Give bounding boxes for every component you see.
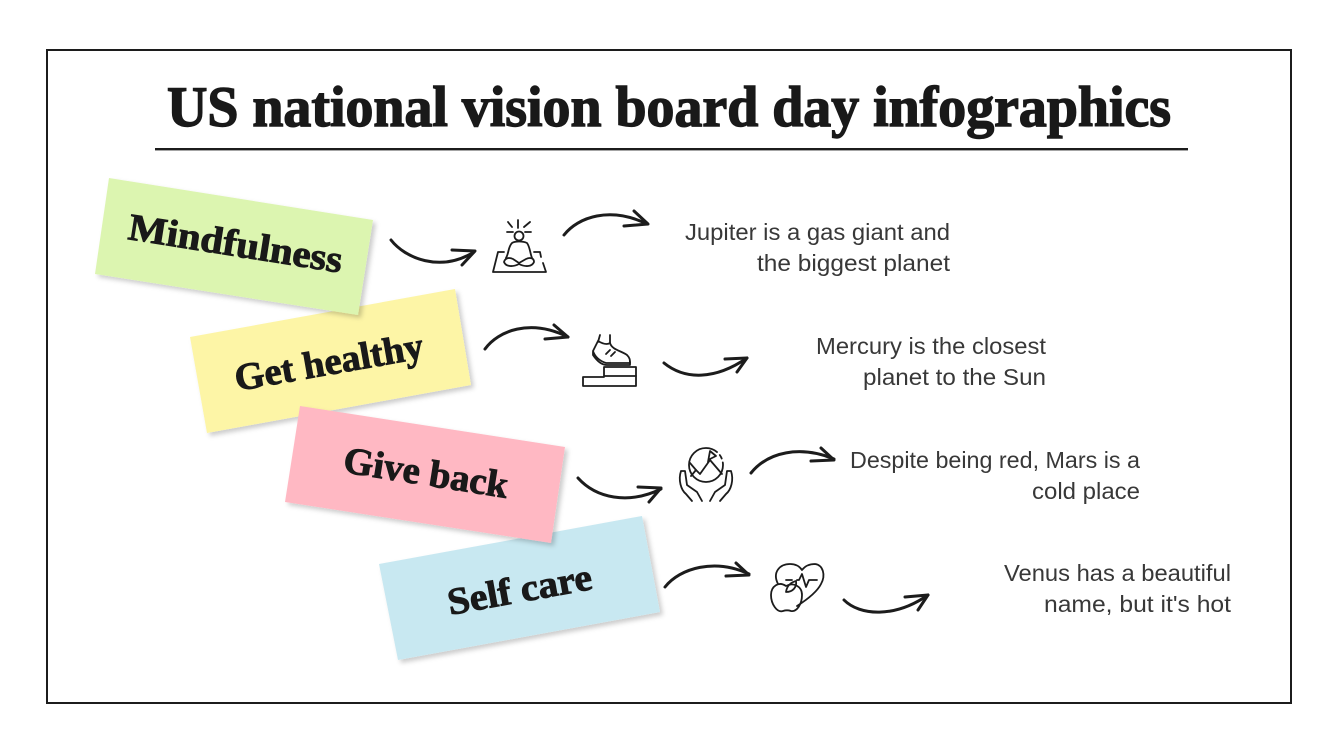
arrow: icon to mars text [751,448,834,473]
text: mars: Despite being red, Mars is a [850,447,1141,473]
text: jupiter: the biggest planet [757,250,950,276]
arrow: self care to icon [665,563,749,587]
arrow: get healthy to icon [485,325,568,349]
note: self care: Self care [444,556,595,624]
note: give back: Give back [341,439,512,507]
title underline [155,148,1188,150]
note: mindfulness: Mindfulness [126,206,346,282]
text: venus: name, but it's hot [1044,591,1231,617]
note: give back [285,406,565,543]
icon: heart and apple [771,564,823,611]
arrow: icon to venus text [844,595,928,612]
text: venus: Venus has a beautiful [1004,560,1231,586]
arrow: mindfulness to icon [391,240,475,265]
text: mars: cold place [1032,478,1140,504]
text: mars [850,447,1141,504]
text: mercury [816,333,1046,390]
text: jupiter [685,219,950,276]
note: get healthy: Get healthy [231,325,427,400]
note: self care [379,516,660,660]
arrow: give back to icon [578,478,661,502]
icon: meditation [493,220,546,272]
text: venus [1004,560,1231,617]
text: mercury: Mercury is the closest [816,333,1046,359]
icon: step shoe [583,335,636,386]
icon: hands holding earth [680,448,732,501]
arrow: icon to mercury text [664,358,747,375]
title: US national vision board day infographics [167,76,1171,139]
note: mindfulness [95,178,373,315]
note: get healthy [190,289,471,433]
arrow: icon to jupiter text [564,211,648,235]
text: mercury: planet to the Sun [863,364,1046,390]
text: jupiter: Jupiter is a gas giant and [685,219,950,245]
